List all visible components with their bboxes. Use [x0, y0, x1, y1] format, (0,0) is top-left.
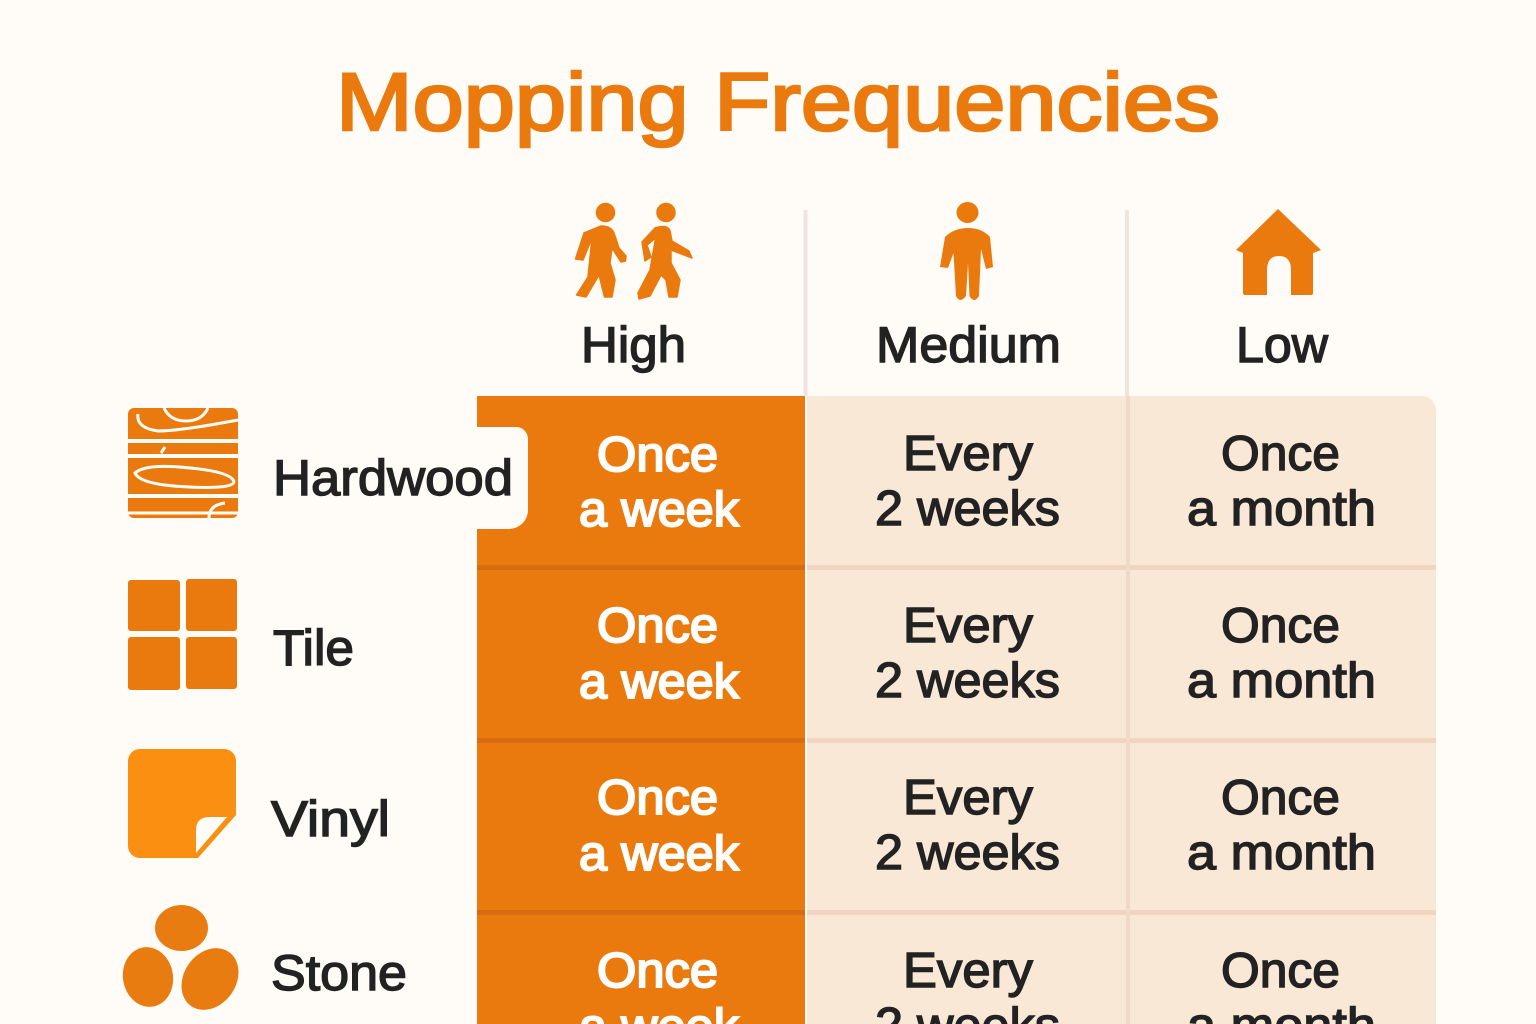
row: hardwood frequencies [579, 427, 1376, 537]
cell: high [579, 428, 740, 537]
cell: medium: 2 weeks [875, 654, 1060, 708]
cell: high: Once [597, 599, 718, 653]
label: high: High [581, 317, 686, 373]
icon: person [940, 202, 993, 300]
row: stone frequencies [579, 944, 1376, 1024]
cell: high: Once [597, 428, 718, 482]
cell: medium: Every [903, 944, 1034, 998]
label: vinyl: Vinyl [271, 791, 390, 847]
column header: medium [876, 202, 1061, 373]
cell: medium: 2 weeks [875, 482, 1060, 536]
row label: vinyl [128, 749, 390, 858]
cell: high [579, 599, 740, 709]
cell: medium [875, 771, 1060, 880]
column header: high [576, 204, 692, 373]
label: stone: Stone [271, 945, 407, 1001]
icon: wood planks [128, 408, 238, 518]
cell: low: a month [1187, 654, 1376, 708]
column header: low [1236, 209, 1329, 373]
cell: low [1187, 427, 1376, 536]
icon: two walking people [576, 204, 692, 299]
cell: high: a week [579, 483, 740, 537]
icon: tiles [128, 579, 237, 690]
cell: high [579, 771, 740, 881]
cell: low: Once [1221, 944, 1340, 998]
title: Mopping Frequencies [336, 57, 1220, 148]
cell: low: a month [1187, 482, 1376, 536]
cell: low: Once [1221, 771, 1340, 825]
panel: high column background [477, 396, 805, 1024]
cell: medium [875, 599, 1060, 708]
panel: medium and low background [807, 396, 1436, 1024]
cell: low [1187, 599, 1376, 708]
row label: tile [128, 579, 354, 690]
cell: low [1187, 771, 1376, 880]
cell: low: Once [1221, 599, 1340, 653]
cell: low: a month [1187, 826, 1376, 880]
cell: high: a week [579, 827, 740, 881]
icon: stones [118, 905, 250, 1021]
cell: high: Once [597, 944, 718, 998]
cell: high: Once [597, 771, 718, 825]
cell: high: a week [579, 655, 740, 709]
cell: low [1187, 944, 1376, 1024]
icon: vinyl sheet [128, 749, 236, 858]
label: medium: Medium [876, 317, 1061, 373]
cell: medium [875, 944, 1060, 1024]
icon: house [1236, 209, 1321, 295]
cell: medium: Every [903, 427, 1034, 481]
cell: medium: Every [903, 599, 1034, 653]
label: hardwood: Hardwood [273, 450, 513, 506]
cell: medium: 2 weeks [875, 826, 1060, 880]
cell: medium [875, 427, 1060, 536]
row label: stone [118, 905, 407, 1021]
row: tile frequencies [579, 599, 1376, 709]
row: vinyl frequencies [579, 771, 1376, 881]
label: low: Low [1236, 317, 1329, 373]
cell: high [579, 944, 740, 1024]
cell: low: Once [1221, 427, 1340, 481]
row label: hardwood [128, 408, 513, 518]
label: tile: Tile [273, 620, 354, 676]
hardwood label tab [477, 427, 528, 529]
cell: medium: Every [903, 771, 1034, 825]
